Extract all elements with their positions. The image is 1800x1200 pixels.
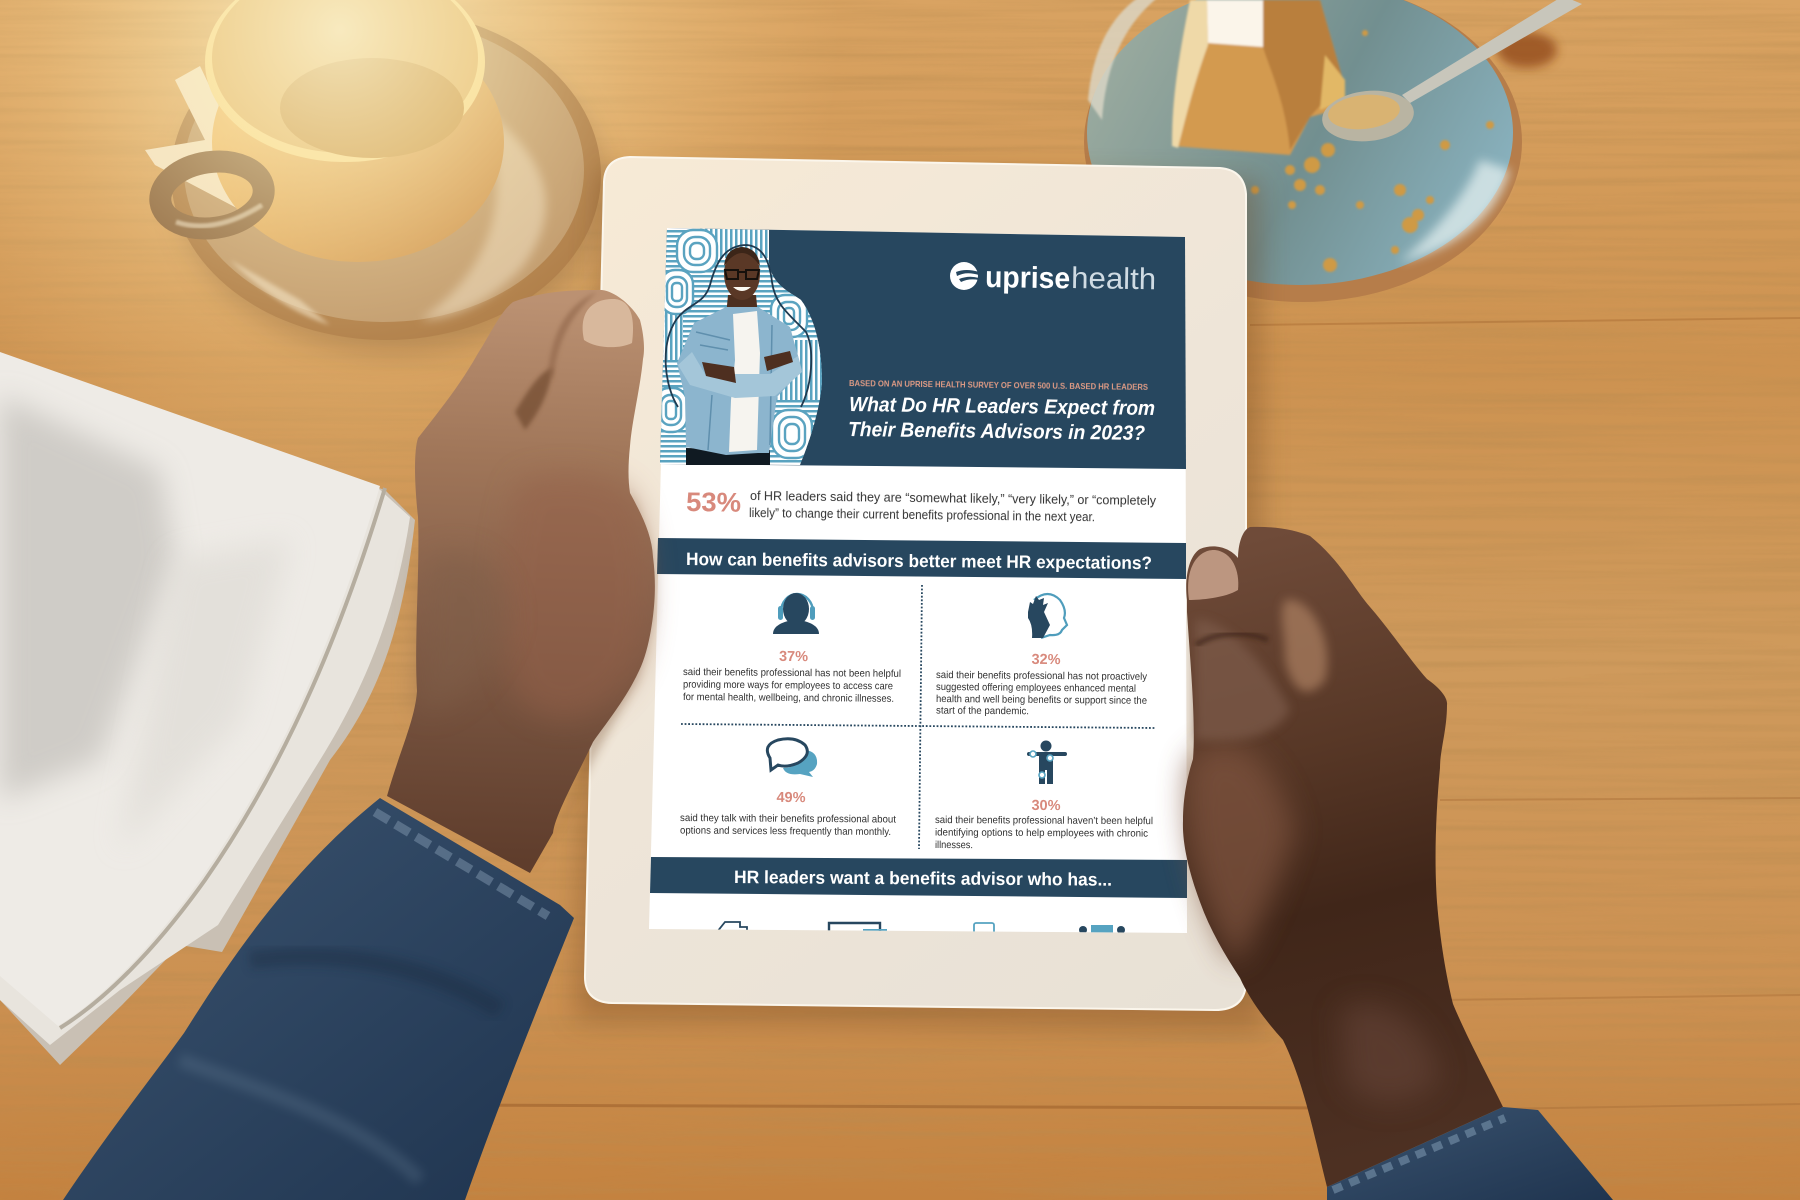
- right hand: [1183, 527, 1503, 1187]
- key statistic 53%: likely” to change their current benefits professional in the next year.: [749, 506, 1095, 524]
- icon: head with hand: [1028, 594, 1067, 638]
- stat 37%: [683, 593, 901, 705]
- stat 32%: suggested offering employees enhanced mental: [936, 682, 1136, 695]
- tablet bezel: [585, 157, 1246, 1010]
- title: What Do HR Leaders Expect from: [849, 393, 1155, 420]
- left thumbnail: [583, 299, 633, 347]
- key statistic 53%: [686, 487, 1157, 524]
- stat 37%: said their benefits professional has not been helpful: [683, 667, 901, 680]
- tablet shadow: [575, 170, 1265, 1030]
- logo: health: [1071, 262, 1156, 296]
- right hand and sleeve: [1183, 527, 1613, 1200]
- title: [848, 393, 1155, 445]
- stat 37%: providing more ways for employees to access care: [683, 680, 893, 692]
- stat 32%: said their benefits professional has not proactively: [936, 670, 1148, 683]
- right sleeve: [1327, 1107, 1613, 1200]
- icon: speech bubbles: [767, 739, 817, 777]
- portrait of man in denim jacket: [666, 245, 811, 465]
- stat 49%: said they talk with their benefits professional about: [680, 813, 896, 826]
- left sleeve: [63, 798, 574, 1200]
- stat 37%: for mental health, wellbeing, and chronic illnesses.: [683, 692, 894, 705]
- spoon: [1402, 0, 1582, 103]
- tablet screen: [649, 225, 1187, 937]
- left hand: [387, 290, 655, 873]
- glasses: [725, 270, 759, 279]
- sugar packet: [145, 66, 290, 215]
- stat 30%: 30%: [1031, 798, 1061, 814]
- stat 32%: start of the pandemic.: [936, 706, 1029, 717]
- patterned blob behind portrait: [660, 228, 822, 465]
- cake slice: [1172, 0, 1345, 155]
- logo: uprise: [985, 261, 1070, 295]
- outline curve: [666, 245, 811, 407]
- right thumbnail: [1188, 550, 1238, 600]
- key statistic 53%: of HR leaders said they are “somewhat likely,” “very likely,” or “completely: [750, 489, 1157, 508]
- icon: headset: [773, 593, 819, 634]
- stat 49%: options and services less frequently than monthly.: [680, 826, 891, 838]
- stat 30%: identifying options to help employees with chronic: [935, 828, 1148, 840]
- crumbs: [1251, 30, 1494, 272]
- section banner: advisor traits: [650, 857, 1187, 898]
- stat 30%: illnesses.: [935, 840, 973, 851]
- left hand and sleeve: [63, 290, 655, 1200]
- stat 32%: [936, 594, 1148, 717]
- section banner: expectations: How can benefits advisors better meet HR expectations?: [686, 549, 1152, 573]
- header banner: [660, 228, 1186, 469]
- section banner: expectations: [657, 538, 1186, 579]
- cup handle: [156, 155, 268, 235]
- stat 37%: 37%: [779, 649, 808, 665]
- survey source line: BASED ON AN UPRISE HEALTH SURVEY OF OVER 500 U.S. BASED HR LEADERS: [849, 378, 1148, 392]
- icon: standing figure with gears: [1027, 740, 1067, 784]
- stat 30%: said their benefits professional haven’t been helpful: [935, 815, 1153, 827]
- folded newspaper: [0, 352, 415, 1065]
- coffee cup and saucer: [145, 0, 604, 352]
- title: Their Benefits Advisors in 2023?: [848, 418, 1146, 445]
- key statistic 53%: 53%: [686, 487, 741, 518]
- tablet: [575, 157, 1265, 1030]
- stat 49%: [680, 739, 896, 838]
- section banner: advisor traits: HR leaders want a benefits advisor who has...: [734, 867, 1112, 890]
- plate with cake and spoon: [1084, 0, 1582, 302]
- stat 32%: 32%: [1031, 652, 1061, 668]
- logo: [950, 261, 1156, 296]
- stat 30%: [935, 740, 1153, 851]
- stat 49%: 49%: [776, 790, 806, 806]
- stat 32%: health and well being benefits or support since the: [936, 694, 1147, 707]
- cropped icons at bottom of screen: [718, 921, 1125, 932]
